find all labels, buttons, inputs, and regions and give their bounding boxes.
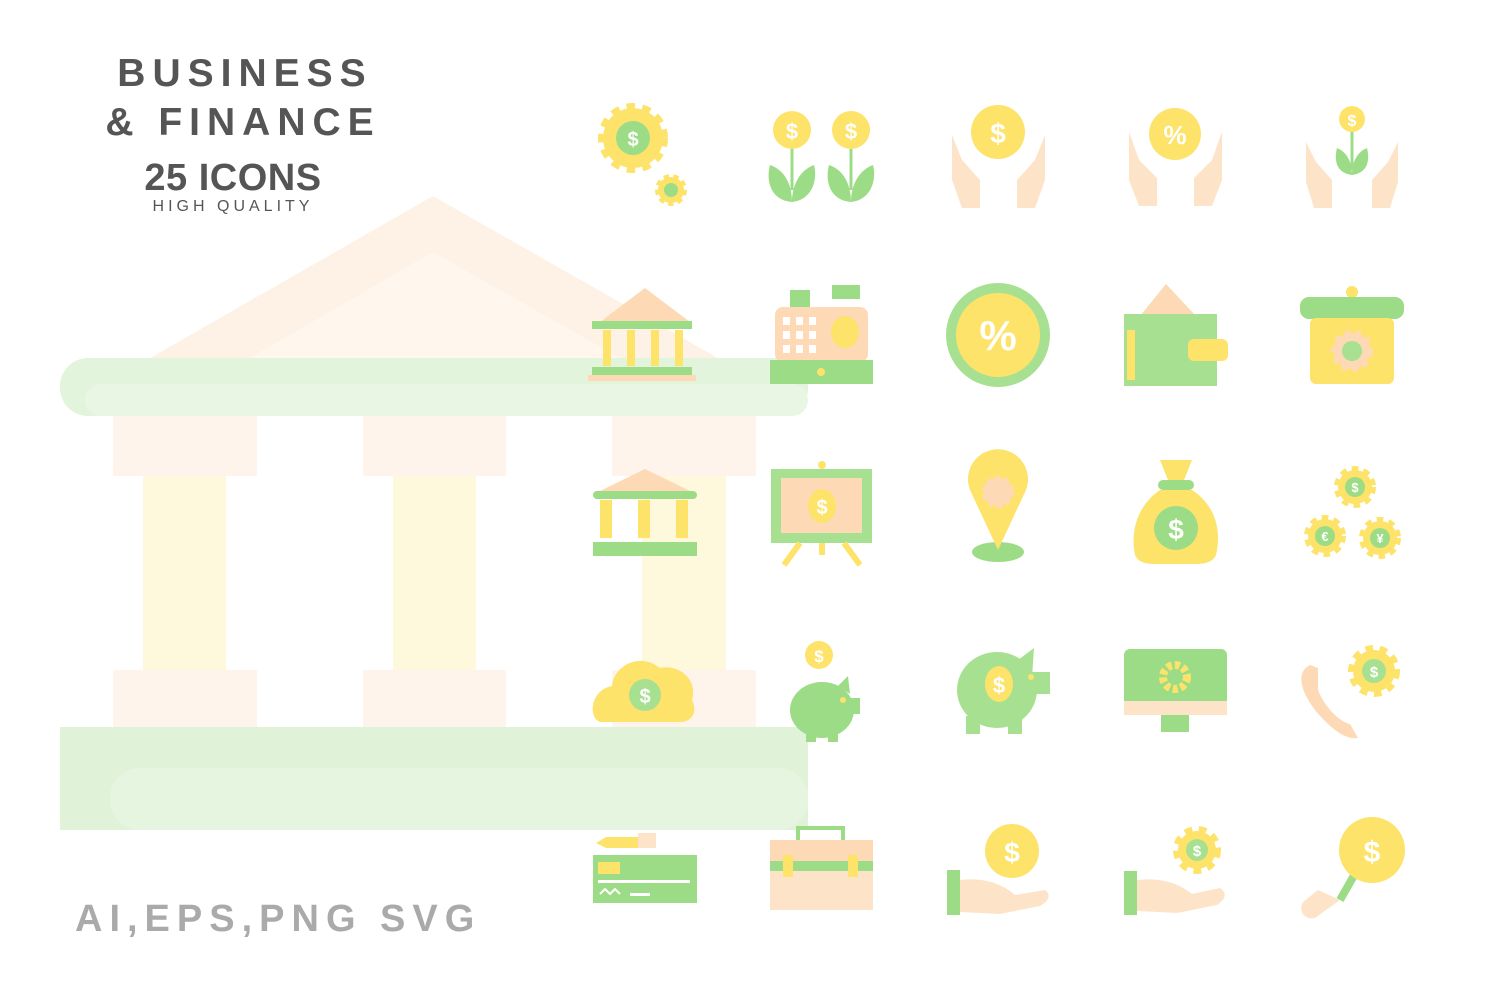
- icon: currency gears: $: [1351, 480, 1359, 495]
- icon: hand gear: $: [1193, 843, 1202, 860]
- icon: percent coin: [946, 283, 1050, 387]
- icon: credit card: [593, 833, 697, 903]
- icon: bank: [588, 288, 696, 381]
- icon: monitor gear: [1124, 649, 1227, 732]
- icon: hands percent: [1129, 108, 1222, 206]
- icon: location pin: [968, 449, 1028, 562]
- icon: currency gears: [1308, 470, 1397, 555]
- icon: cash register: [770, 285, 873, 384]
- icon: presentation board: $: [816, 497, 828, 519]
- icon: hands plant: $: [1348, 113, 1357, 130]
- icon: small bank: [593, 469, 697, 556]
- icon: percent coin: %: [979, 312, 1017, 359]
- icon: hands percent: %: [1163, 120, 1187, 150]
- icon: hand gear: [1124, 831, 1225, 915]
- icon: gear dollar: $: [627, 129, 639, 151]
- icon: wallet: [1124, 284, 1228, 386]
- icon: magnifier coin: $: [1364, 836, 1381, 869]
- icon: hand coin: $: [1004, 837, 1020, 868]
- title: HIGH QUALITY: [153, 198, 313, 215]
- icon: money bag: [1134, 460, 1218, 564]
- icon: hand coin: [947, 824, 1049, 915]
- icon: presentation board: [771, 461, 872, 565]
- icon: phone gear: [1301, 650, 1395, 738]
- icon: piggy small: [790, 641, 860, 742]
- icon: phone gear: $: [1370, 664, 1379, 681]
- icon: money plants: [769, 111, 874, 202]
- title: BUSINESS: [117, 52, 373, 95]
- icon: cloud money: $: [639, 686, 651, 708]
- icon: money plants: $: [786, 119, 798, 144]
- icon: piggy big: [957, 648, 1050, 734]
- title: 25 ICONS: [144, 157, 322, 199]
- icon: cloud money: [593, 661, 694, 722]
- icon: piggy small: $: [814, 647, 824, 666]
- icon: briefcase: [770, 828, 873, 910]
- icon: currency gears: ¥: [1376, 531, 1384, 546]
- icon: money bag: $: [1168, 514, 1184, 545]
- background bank illustration: [60, 196, 808, 830]
- title: [105, 52, 381, 215]
- icon: jar: [1300, 286, 1404, 384]
- icon: magnifier coin: [1301, 817, 1405, 918]
- icon: hands coin: [952, 105, 1045, 208]
- icon: piggy big: $: [993, 673, 1005, 698]
- icon: gear dollar: [603, 108, 684, 203]
- icon: money plants: $: [845, 119, 857, 144]
- icon: hands plant: [1306, 106, 1398, 208]
- title: & FINANCE: [105, 101, 381, 144]
- format text: AI,EPS,PNG SVG: [75, 898, 481, 940]
- icon: currency gears: €: [1321, 529, 1329, 544]
- icon: hands coin: $: [990, 118, 1006, 149]
